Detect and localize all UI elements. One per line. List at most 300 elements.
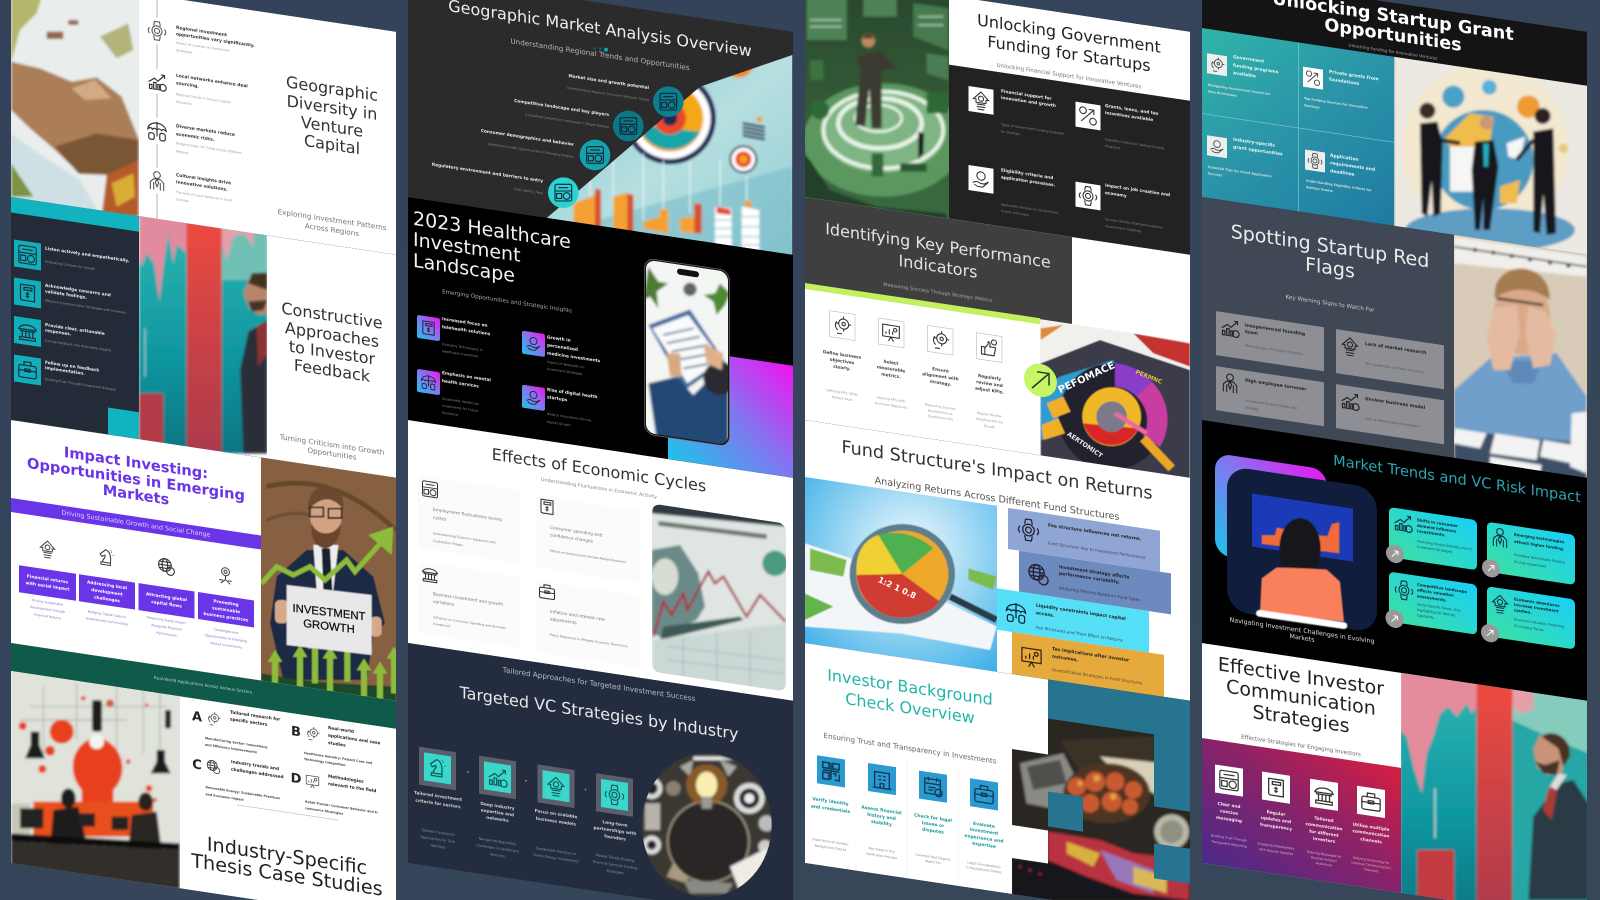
item: global capital [138,555,194,641]
item: diverse markets: Diverse markets reduce [176,123,235,138]
item: industry grants: grant opportunities [1233,144,1283,158]
item: evaluate experience: Legal Considerations [967,860,1001,869]
title: Geographic [286,72,378,105]
gauge labels: PEFOMACE [1057,360,1117,396]
icon: hand [1207,135,1227,158]
title: Diversity in [287,91,377,124]
item A [192,710,280,754]
item: verify identity: Background Checks [815,843,847,852]
title: Identifying Key Performance [825,219,1051,272]
item: cultural insights: The Role of Local Networks in Fund [175,190,232,203]
icon: QR [817,755,845,788]
item: impact: Success Stories: Startups Funded by [1105,217,1163,230]
icon: gear tree [308,726,319,741]
item: application requirements: requirements and [1330,160,1375,173]
item: ensure alignment: Quantitative vs. [928,408,953,416]
item: personalized medicine: Investment Strategies [547,367,583,376]
gauge labels: PERMNC [1134,369,1164,386]
title: Targeted VC Strategies by Industry [459,683,739,744]
item: multiple channels: Channels [1364,867,1379,873]
item: industry grants: Essential Tips for Grant Application [1208,165,1272,179]
title [1218,652,1384,743]
item: regular review: Adapting KPIs for [976,417,1004,425]
item: financial support: for Startups [1001,129,1020,136]
item: define objectives: Matters Most [832,395,853,402]
item: tailored communication [1305,778,1342,869]
card: competitive landscape: assessments. [1417,593,1447,603]
item: define objectives: Define business [823,349,862,361]
item: define objectives [823,310,862,403]
item D: commerce Strategies [305,806,343,816]
photo: green stage with speaker [800,0,963,233]
title [977,10,1161,77]
item: deep expertise: Navigating Regulatory [479,837,516,846]
item: tailored communication: Tailored [1314,815,1334,824]
card: economic downturns: caution. [1514,607,1532,615]
item: clear messaging [1210,764,1247,849]
item: financial returns: with social impact [26,580,69,593]
caption: Markets [1290,633,1314,644]
card: employment: Employment fluctuations during [433,507,502,523]
item: impact [1076,178,1170,238]
title: Effects of Economic Cycles [492,445,706,496]
item: grants: Programs [1105,144,1120,150]
item: ensure alignment: alignment with [922,371,959,383]
item: impact: Impact on job creation and [1105,183,1170,198]
subtitle: Unlocking Funding for Innovative Ventures [1349,42,1437,61]
icon: chart [1395,514,1412,533]
item: telehealth: Healthcare Investment [442,349,479,359]
item: clear messaging: Transparent Reporting [1210,839,1247,849]
item: financial returns: Financial returns [27,573,68,586]
item: government programs: available [1233,70,1256,80]
item: application requirements: Understanding Eligibility Criteria for [1306,179,1372,192]
bar: strategy: Investment strategy affects [1059,564,1130,581]
item: eligibility: Application Process for Government [1001,202,1059,215]
item: define objectives: Defining KPIs: What [826,388,858,397]
item: sustainable practices: Opportunities in Emerging [205,633,247,643]
card: market research: Poor Leadership and Team Dynamics [1365,361,1424,374]
bar: fee structure: Fund Structure: Key to Investment Performance [1048,540,1146,560]
card: business model: Unclear business model [1365,396,1426,411]
header band [11,643,396,729]
subtitle: Opportunities [307,446,357,462]
bar: strategy: Analyzing Returns Based on Fund Types [1059,585,1140,602]
title: Investment [413,228,521,267]
gradient block [668,347,793,478]
item: select metrics: measurable [877,364,905,375]
icon: watch [1076,182,1100,210]
gauge labels: AERTOMICT [1066,431,1104,460]
item: industry grants [1207,133,1283,187]
icon: hands heart [522,385,545,411]
bar: tax [1012,632,1164,697]
card: inexperienced team: Inexperienced founding [1245,322,1305,337]
item B: applications and case [328,733,380,746]
item: assess finances: Key Steps in the [869,846,894,854]
item: local networks: Local networks enhance deal [176,73,248,90]
item: consumer demographics: Consumer demographics and behavior [481,128,575,148]
item: ensure alignment: strategy. [930,379,952,388]
item: deep expertise: expertise and [481,807,514,818]
item: verify identity: Verify identity [812,796,849,808]
item: select metrics: Business Objectives [875,401,907,410]
icon: gear bulb [830,311,855,340]
title: Constructive [281,299,383,333]
subtitle band [11,498,261,550]
item: sustainable practices [198,564,254,651]
card: employee turnover: Inconsistent Business Model and [1245,398,1297,410]
item: tailored criteria [414,746,462,852]
photo: man covering face [1452,233,1592,500]
panel: Unlocking Startup Grant Opportunities [1202,0,1593,260]
item: digital startups: startups [547,394,568,403]
item: grants: Grants, loans, and tax [1105,103,1159,117]
item: acknowledge: validate feelings. [45,289,87,301]
item: mental health: Investments for Future [442,404,478,413]
item: government programs [1207,50,1279,104]
magnifier reading: 1:2 1 0.8 [876,574,918,601]
item: deep expertise: Challenges in Healthcare [476,843,519,854]
item: local networks: Regional Trends in Venture Capital [176,92,231,104]
item: market size: Market size and growth potential [568,73,650,91]
item: partnerships: Long-term [602,819,628,829]
item: partnerships: partnerships with [594,825,636,837]
item: listen [14,240,130,270]
item: legal issues: Watch For [925,859,942,865]
item: grants [1076,99,1164,157]
subtitle: Ensuring Trust and Transparency in Investments [824,731,997,766]
item: cultural insights: Cultural insights drive [176,172,231,186]
item: legal issues: disputes [922,827,944,836]
panel: 2023 Healthcare Investment Landscape [408,197,793,478]
item: telehealth: telehealth solutions [442,324,491,337]
item: listen: Embracing Criticism for Growth [45,260,95,271]
item: provide: responses. [45,328,72,338]
item: follow up: Building Trust Through Transparent Dialogue [45,377,116,392]
title: Feedback [294,356,371,386]
item: assess finances [861,762,902,861]
item: mental health: Sustainable Healthcare [442,397,479,406]
item: acknowledge: Effective Communication Strategies with Investors [45,299,126,315]
subtitle: Effective Strategies for Engaging Investors [1241,734,1361,758]
item: clear messaging: Clear and [1217,801,1241,810]
item: evaluate experience: Evaluate [973,821,995,830]
item C [192,753,284,808]
title: Thesis Case Studies [190,849,383,900]
item: legal issues: Check for legal [914,812,952,824]
phone photo: signing a document [640,253,737,453]
item: regular review: Regular Review: [977,411,1002,419]
title: Strategies [1253,700,1350,738]
bar: liquidity: Fee Structures and Their Effect on Returns [1036,625,1123,643]
item: tailored communication: communication [1306,821,1342,833]
item: regular updates: transparency [1260,822,1292,833]
panel: Investor Background Check Overview [805,643,1197,900]
item: competitive landscape: Competitive landscape and key players [514,98,609,118]
icon: briefcase [1357,786,1385,818]
item: impact: Government Initiatives [1105,224,1142,234]
title: Indicators [899,251,977,282]
item: regulatory environment: rural_liability_here [514,187,543,195]
card: employment: Contraction Phases [433,539,463,547]
item: regular updates: Engaging Stakeholders [1258,841,1295,851]
item: diverse markets: Regions [176,149,189,155]
item B [291,720,380,772]
card: consumer spending: Consumer spending and [550,525,603,539]
icon: calculator [14,239,41,270]
item: global capital: Performance [156,631,177,638]
item: government programs: funding programs [1233,63,1279,75]
item: financial returns: Driving Sustainable [32,598,63,607]
photo: dollar bill and red chart [650,500,790,697]
item: diverse markets [147,122,242,154]
item: eligibility: Grants and Loans [1001,209,1029,217]
card: inexperienced team [1216,311,1324,371]
phone frame [644,258,730,447]
item: regulatory environment [432,162,543,195]
item: verify identity [811,754,850,853]
item: application requirements: Application [1330,153,1359,163]
item A: A [192,709,203,726]
item: clear messaging: messaging [1216,815,1242,824]
card: consumer demand [1386,507,1477,575]
item B: studies [328,740,346,749]
card: economic downturns [1481,585,1575,655]
card: employee turnover [1216,366,1324,426]
icon: watch [1395,580,1413,601]
item: tailored criteria: Tailored Investment [420,828,455,837]
item: eligibility [968,163,1059,222]
panel: Fund Structure's Impact on Returns [800,420,1190,701]
lime arrow badge [1024,361,1057,399]
card: market research: Lack of market research [1365,341,1426,356]
subtitle: Exploring Investment Patterns [278,207,387,232]
item: ensure alignment: Qualitative KPIs [928,414,953,422]
item: deep expertise: Deep industry [480,801,515,812]
item: partnerships: founders [604,833,626,843]
icon: house money [40,540,55,559]
item: ensure alignment [922,325,959,423]
icon: chart [1222,319,1239,338]
card: economic downturns: VC Funding Trends [1514,624,1544,632]
item: multiple channels [1351,785,1391,875]
title: Impact Investing: [64,444,208,483]
item: clear messaging: concise [1220,808,1238,817]
item: local development: Bridging Capital Gaps in [88,610,126,619]
item: legal issues: Common Red Flags to [916,853,951,862]
bar: liquidity: Liquidity constraints impact capital [1036,603,1126,622]
subtitle: Unlocking Financial Support for Innovative Ventures [997,63,1141,90]
bar: fee structure: Fee structure influences net returns. [1048,522,1142,542]
title: Check Overview [845,689,975,727]
illustration: target and bars [533,46,800,277]
item: sustainable practices: business practices [204,611,249,624]
item: local development: development [91,587,123,598]
icon: thumbs up [976,333,1002,363]
card: consumer spending [535,495,640,583]
title: to Investor [289,337,376,369]
icon: watch [596,773,633,817]
icon: chart [149,73,166,92]
title [286,76,378,154]
card: competitive landscape: Capitalists [1417,613,1434,620]
title: Market Trends and VC Risk Impact [1333,452,1581,506]
item D: Methodologies [328,774,364,785]
item: regular review: adjust KPIs. [975,386,1004,396]
photo: three people and globe [1393,53,1593,260]
title: Landscape [413,249,515,287]
panel: Effects of Economic Cycles [408,420,793,701]
item: application requirements [1305,149,1375,199]
item: private grants: Startups [1304,103,1320,110]
item D: D [291,771,302,788]
item: digital startups [522,383,597,431]
icon badges [548,48,684,208]
item: scalable models: business models [536,816,576,828]
panel: Industry-Specific Thesis Case Studies [11,643,396,900]
title: Venture [301,113,363,141]
photo: red bulb office illustration [11,667,181,900]
item: private grants: foundations [1329,77,1360,87]
item D: Retail Trends: Consumer Behavior and E- [305,800,379,815]
photo: investment growth sign [260,453,401,708]
item: eligibility: Eligibility criteria and [1001,167,1053,181]
item: regular review: Regularly [978,373,1001,382]
item: partnerships [593,773,637,877]
item: telehealth: Emerging Technologies in [442,342,483,352]
item: market size [567,73,650,102]
item: cultural insights: Success [176,197,189,203]
icon: person [1493,528,1507,548]
item: financial returns: Financial Returns [34,612,61,621]
icon: chart [479,756,516,799]
title: Fund Structure's Impact on Returns [841,438,1153,504]
item: sustainable practices: Challenges and [214,627,238,635]
item: market size: Understanding Regional Consumer Behavior Trends [567,86,649,102]
title: Industry-Specific [207,832,367,879]
photo: fruit bowl and chart [1010,673,1197,900]
icon: book [541,499,553,514]
card: business investment: variations [433,599,455,608]
item: tailored criteria: Startups [431,843,445,850]
item: diverse markets: economic risks. [176,131,215,143]
panel: Geographic Market Analysis Overview [408,0,800,277]
icon: building [868,763,896,795]
item A: Manufacturing Sector: Innovations [205,736,268,749]
subtitle band: Driving Sustainable Growth and Social Change [62,509,211,539]
item: financial support: Financial support for [1001,88,1052,102]
header band: Real-World Applications Across Various Sectors [154,675,252,695]
icon: board [306,775,319,789]
card: competitive landscape: Sector-Specific Trends: Risk [1417,602,1461,613]
item: select metrics: metrics. [881,371,901,380]
card: competitive landscape [1386,571,1477,640]
card: economic downturns: increase investment [1514,602,1559,614]
card: inflation [535,580,640,668]
item: acknowledge [14,278,126,314]
bar: strategy: performance variability. [1059,571,1120,586]
item: tailored communication: Tailoring Messages for [1305,850,1342,859]
icon: bank [422,568,438,583]
item: industry grants: Success [1208,171,1222,178]
item: private grants [1303,65,1379,119]
photo: bulb and business icons [637,750,780,900]
bar: tax: Diversification Strategies in Fund Structures [1052,667,1142,686]
item: financial returns [19,537,76,623]
icon: gear [1207,53,1227,76]
icon: watch [1305,149,1325,172]
item: telehealth [417,312,491,360]
illustration: woman viewing chart [1259,518,1344,626]
item: financial support: innovation and growth [1001,95,1056,109]
item: application requirements: Startup Grants [1306,185,1333,193]
item: regular updates: with Regular Updates [1259,847,1293,856]
item: regional opportunities [148,20,254,54]
title: Opportunities in Emerging [27,455,245,505]
panel: Market Trends and VC Risk Impact [1202,420,1587,701]
item B: Healthcare Industry: Patient Care and [304,751,373,765]
icon: gear trophy [928,325,953,355]
item: consumer demographics [481,128,575,159]
item: regular review: Growth [984,424,995,430]
card: economic downturns: Economic Indicators: Predicting [1514,617,1564,629]
item: cultural insights: innovative solutions. [176,179,228,193]
item: global capital: Alongside Financial [151,623,182,632]
icon: calculator [422,481,438,498]
icon: house [538,764,574,808]
item: competitive landscape [514,98,609,129]
item: multiple channels: Utilize multiple [1353,822,1389,833]
title: Spotting Startup Red [1231,220,1429,273]
item A: Tailored research for [230,709,281,723]
item: scalable models: Focus on scalable [535,808,577,820]
item: assess finances: stability [871,819,892,828]
item: regional opportunities: Impact of Location on Investment [176,41,230,53]
title: 2023 Healthcare [413,207,571,253]
card: emerging technologies: attract higher funding. [1514,539,1565,551]
subtitle: Understanding Regional Trends and Opportunities [510,36,690,72]
subtitle: Turning Criticism into Growth [279,432,384,457]
item: define objectives: objectives [830,357,855,366]
item: define objectives: clearly. [833,364,851,372]
item: regular updates: updates and [1261,815,1291,825]
title: Markets [103,482,169,509]
icon: chart [1342,392,1359,411]
item: local networks: sourcing. [176,80,199,90]
item: local networks [148,74,248,105]
item: tailored communication: Audiences [1316,861,1333,868]
icon: globe [207,760,220,774]
card: consumer spending: Effects on Employment and Job Market Dynamics [550,549,627,564]
icon: globe money [159,558,174,576]
title [413,207,571,295]
icon: person [150,171,164,191]
screen [1252,494,1353,562]
item C: challenges addressed [231,767,284,780]
item: evaluate experience: experience and [965,833,1003,845]
item: impact: economy [1105,191,1127,199]
item: personalized medicine: Growth in [547,334,571,344]
item: regular updates: Regular [1267,809,1286,818]
card: inexperienced team: Warning Signs of Financial Instability [1245,343,1304,356]
card: inflation: adjustments [550,616,577,626]
icon: shield [417,369,440,395]
item: evaluate experience: expertise [972,841,996,850]
icon: calendar [919,771,947,803]
card: consumer spending: confidence changes [550,532,594,545]
item: grants: Eligibility Criteria for Startup Funding [1105,138,1164,150]
